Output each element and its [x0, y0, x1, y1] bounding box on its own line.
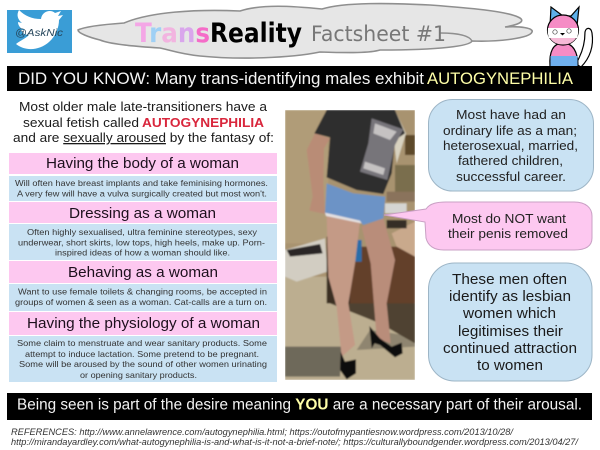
icon: twitter handle badge — [7, 10, 72, 53]
panel: body of a woman: Will often have breast implants and take feminising hormones. — [15, 178, 268, 188]
callout: penis removed — [384, 202, 592, 250]
banner: being seen: Being seen is part of the desire meaning YOU are a necessary part of their arousal. — [17, 396, 582, 414]
callout: penis removed: their penis removed — [448, 227, 568, 241]
callout: penis removed: Most do NOT want — [452, 212, 567, 226]
callout: lesbian identity: identify as lesbian — [449, 289, 571, 305]
panel: physiology of a woman — [9, 312, 277, 382]
panel: dressing as a woman: inspired ideas of how a woman should like. — [55, 248, 230, 258]
icon: trans flag cat — [548, 7, 593, 67]
panel: body of a woman: A very few will have a vulva surgically created but most won't. — [17, 188, 267, 198]
callout: ordinary life: Most have had an — [456, 108, 566, 122]
references: REFERENCES: http://www.annelawrence.com/autogynephilia.html; https://outofmypantiesnow.wordpress.com/2013/10/28/ — [11, 427, 515, 437]
heading: TransReality Factsheet #1: Reality — [210, 18, 302, 49]
heading: TransReality Factsheet #1 — [135, 18, 446, 49]
intro text: AUTOGYNEPHILIA — [142, 115, 265, 130]
callout: ordinary life — [428, 100, 594, 191]
panel: dressing as a woman: Dressing as a woman — [69, 205, 216, 222]
panel: behaving as a woman — [9, 261, 277, 311]
callout: lesbian identity: These men often — [452, 272, 567, 288]
intro text: and are sexually aroused by the fantasy of: — [13, 130, 274, 145]
banner: did you know: DID YOU KNOW: Many trans-identifying males exhibit — [18, 69, 424, 88]
references: http://mirandayardley.com/what-autogynephilia-is-and-what-is-it-not-a-brief-note/; https://culturallyboundgender.wordpress.com/2013/04/27/ — [11, 437, 580, 447]
callout: lesbian identity: continued attraction — [443, 341, 577, 357]
panel: physiology of a woman: or opening sanitary products. — [80, 370, 197, 380]
panel: physiology of a woman: Some will be aroused by the sound of other women urinating — [19, 359, 267, 369]
callout: ordinary life: ordinary life as a man; — [443, 124, 577, 138]
panel: body of a woman — [9, 153, 277, 201]
panel: behaving as a woman: Behaving as a woman — [68, 264, 218, 281]
banner: being seen — [7, 393, 592, 420]
callout: lesbian identity: women which — [462, 306, 556, 322]
intro text: Most older male late-transitioners have a — [19, 99, 268, 114]
panel: dressing as a woman — [9, 202, 277, 260]
callout: lesbian identity: legitimises their — [458, 324, 563, 340]
panel: physiology of a woman: attempt to induce lactation. Some pretend to be pregnant. — [25, 349, 259, 359]
intro text — [13, 99, 274, 145]
callout: ordinary life: successful career. — [456, 170, 566, 184]
callout: ordinary life: fathered children, — [458, 154, 563, 168]
icon: twitter handle badge: @AskNic — [15, 28, 63, 39]
banner: did you know: AUTOGYNEPHILIA — [427, 69, 574, 88]
callout: lesbian identity: to women — [477, 358, 543, 374]
panel: body of a woman: Having the body of a woman — [46, 155, 239, 172]
panel: dressing as a woman: underwear, short skirts, low tops, high heels, make up. Porn- — [18, 238, 265, 248]
panel: behaving as a woman: groups of women & seen as a woman. Cat-calls are a turn on. — [15, 297, 267, 307]
title cloud banner — [78, 4, 532, 58]
panel: physiology of a woman: Having the physiology of a woman — [27, 315, 260, 332]
heading: TransReality Factsheet #1: Trans — [135, 18, 210, 49]
intro text: sexual fetish called — [23, 115, 139, 130]
callout: lesbian identity — [428, 263, 592, 381]
panel: behaving as a woman: Want to use female toilets & changing rooms, be accepted in — [18, 286, 267, 296]
photo: standing figure in shirt, denim shorts and heels — [285, 110, 415, 380]
panel: physiology of a woman: Some claim to menstruate and wear sanitary products. Some — [17, 338, 267, 348]
references — [11, 427, 580, 447]
heading: TransReality Factsheet #1: Factsheet #1 — [311, 22, 446, 46]
banner: did you know — [7, 66, 592, 91]
callout: ordinary life: heterosexual, married, — [443, 139, 578, 153]
panel: dressing as a woman: Often highly sexualised, ultra feminine stereotypes, sexy — [27, 227, 258, 237]
